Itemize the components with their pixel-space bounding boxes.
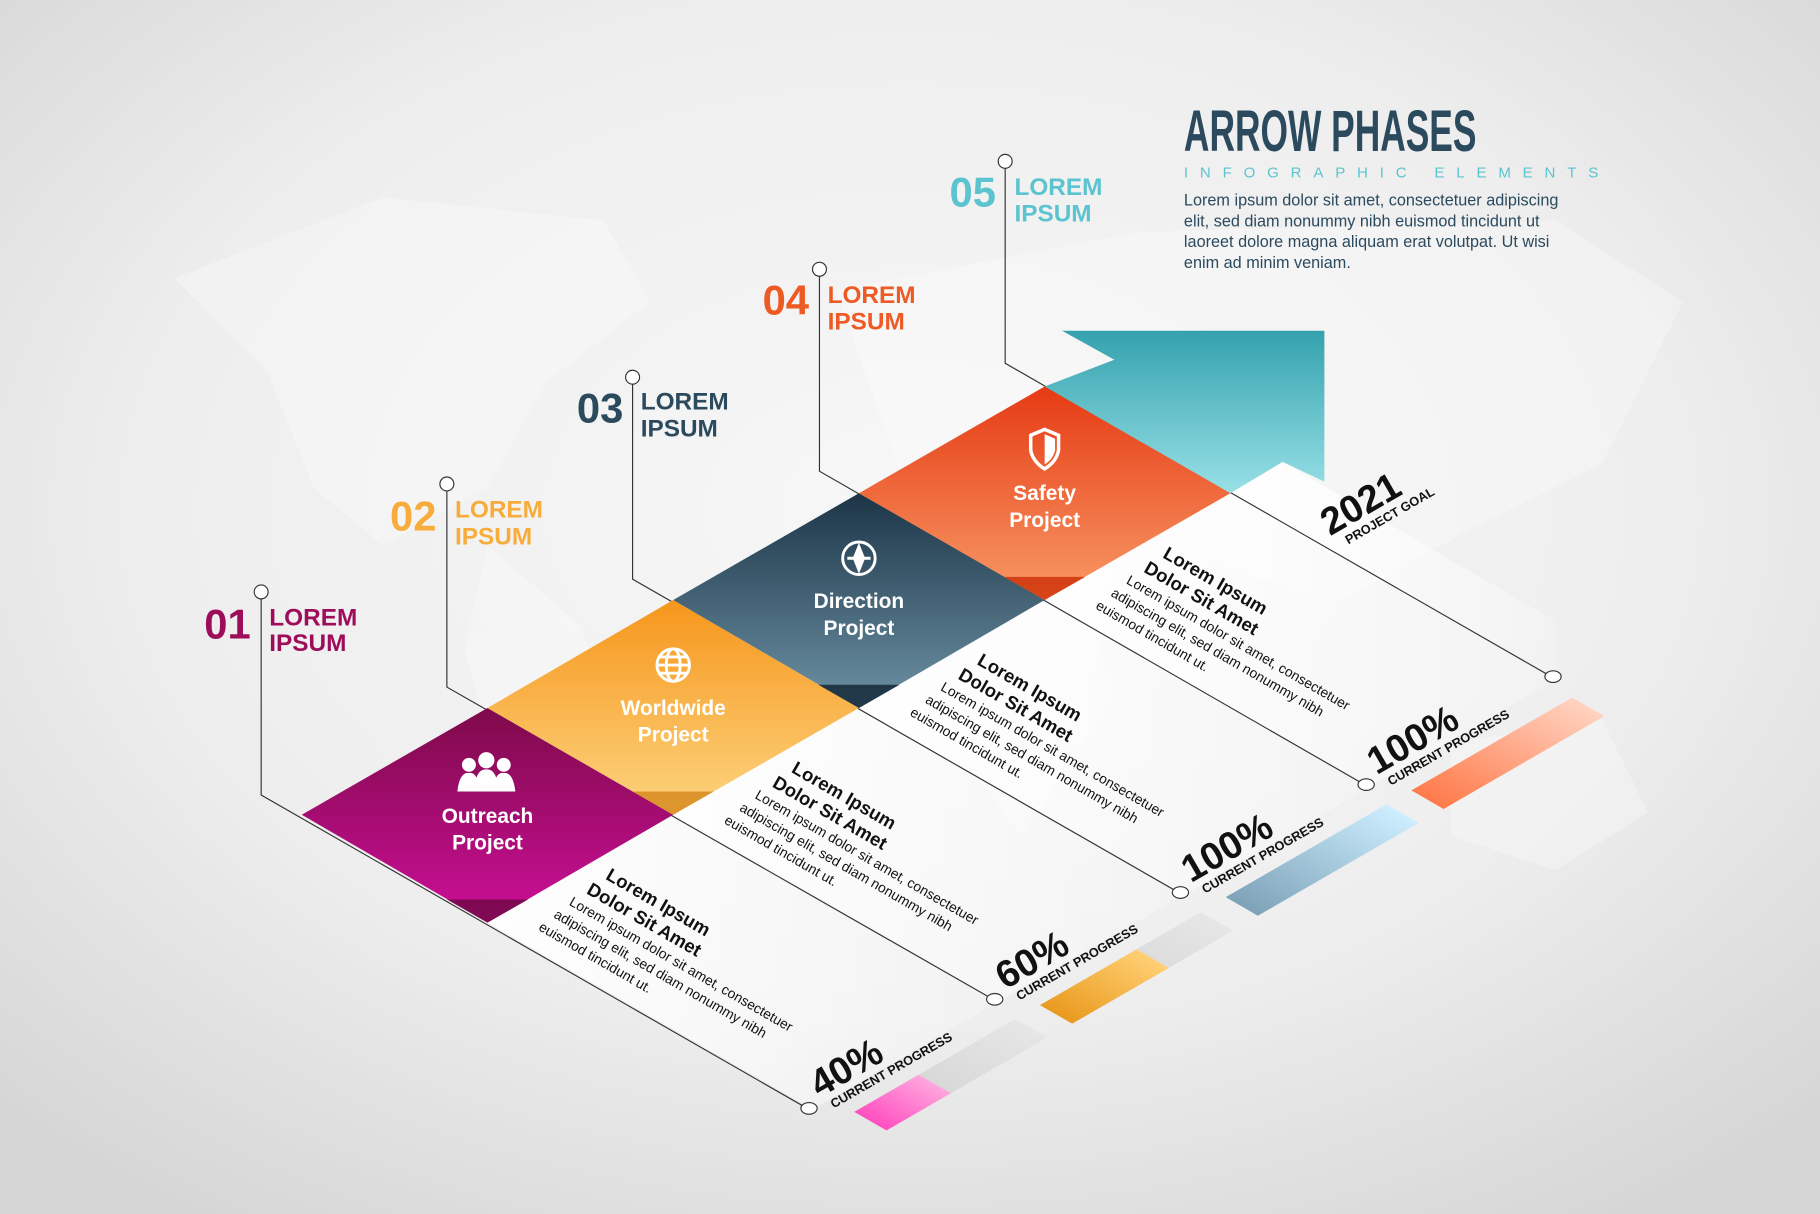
title block: ARROW PHASES	[1184, 99, 1476, 164]
title block: enim ad minim veniam.	[1184, 254, 1351, 272]
step labels	[204, 169, 1102, 657]
step 3: direction: Direction	[814, 590, 904, 613]
step labels: LOREM	[1014, 174, 1102, 201]
step 1: outreach: Outreach	[442, 805, 533, 828]
title block: laoreet dolore magna aliquam erat volutpat. Ut wisi	[1184, 233, 1549, 251]
progress labels: 40%	[802, 1030, 890, 1106]
band texts	[536, 526, 1376, 1067]
step labels: IPSUM	[455, 523, 532, 550]
band texts: Lorem ipsum dolor sit amet, consectetuer	[938, 679, 1167, 820]
step 4: safety	[859, 386, 1230, 600]
step 4: safety: Project	[1009, 509, 1080, 532]
progress labels: 100%	[1360, 697, 1466, 783]
step labels: LOREM	[455, 497, 543, 524]
icon: globe	[657, 649, 689, 681]
step labels: IPSUM	[269, 630, 346, 657]
step 1: outreach	[302, 708, 673, 923]
band texts: adipiscing elit, sed diam nonummy nibh	[1109, 584, 1327, 720]
band texts: Lorem ipsum dolor sit amet, consectetuer	[567, 893, 796, 1035]
band texts: Lorem ipsum dolor sit amet, consectetuer	[753, 786, 982, 928]
progress labels: 60%	[988, 922, 1076, 998]
step labels: 05	[949, 169, 996, 216]
band texts: Dolor Sit Amet	[584, 878, 705, 961]
step labels: LOREM	[828, 282, 916, 309]
band texts: euismod tincidunt ut.	[908, 704, 1026, 781]
band texts: Dolor Sit Amet	[1141, 557, 1262, 639]
band texts: adipiscing elit, sed diam nonummy nibh	[923, 691, 1141, 826]
icon: shield	[1031, 429, 1059, 469]
title block: INFOGRAPHIC ELEMENTS	[1184, 165, 1598, 182]
step labels: 04	[763, 277, 809, 324]
band texts: Lorem Ipsum	[603, 864, 714, 940]
step 1: outreach: Project	[452, 832, 523, 855]
step labels: IPSUM	[828, 309, 905, 336]
step labels: LOREM	[641, 389, 729, 416]
band texts: Dolor Sit Amet	[955, 664, 1077, 746]
title block: Lorem ipsum dolor sit amet, consectetuer adipiscing	[1184, 191, 1558, 209]
band texts: adipiscing elit, sed diam nonummy nibh	[552, 906, 770, 1041]
step 4: safety: Safety	[1013, 482, 1076, 505]
step 3: direction: Project	[824, 617, 894, 640]
step labels: 03	[577, 384, 623, 431]
progress bars	[854, 1019, 1047, 1130]
band texts: euismod tincidunt ut.	[536, 918, 655, 996]
progress labels: 100%	[1174, 805, 1280, 891]
step 2: worldwide	[488, 600, 859, 815]
title block: elit, sed diam nonummy nibh euismod tincidunt ut	[1184, 212, 1540, 230]
progress labels: CURRENT PROGRESS	[1385, 706, 1512, 788]
band texts: euismod tincidunt ut.	[722, 812, 840, 889]
progress labels	[802, 451, 1512, 1115]
step labels: 01	[204, 600, 251, 647]
step labels: IPSUM	[641, 415, 718, 442]
icon: people	[457, 752, 515, 792]
step 2: worldwide: Worldwide	[621, 697, 726, 720]
band texts: Dolor Sit Amet	[769, 772, 891, 854]
progress labels: PROJECT GOAL	[1342, 484, 1437, 547]
title block	[1184, 99, 1598, 272]
band texts: Lorem Ipsum	[1160, 542, 1271, 619]
progress labels: CURRENT PROGRESS	[828, 1029, 955, 1111]
step labels: 02	[390, 492, 436, 539]
band texts: adipiscing elit, sed diam nonummy nibh	[737, 799, 955, 934]
progress labels: CURRENT PROGRESS	[1013, 921, 1140, 1003]
bands: white strips under steps	[488, 462, 1555, 1110]
icon: compass	[843, 542, 875, 575]
step labels: IPSUM	[1014, 201, 1092, 228]
band texts: Lorem Ipsum	[788, 757, 900, 834]
band texts: euismod tincidunt ut.	[1093, 597, 1212, 675]
progress labels: 2021	[1313, 464, 1408, 544]
band texts: Lorem ipsum dolor sit amet, consectetuer	[1124, 572, 1353, 713]
step labels: LOREM	[269, 605, 357, 632]
progress labels: CURRENT PROGRESS	[1199, 814, 1326, 896]
step 2: worldwide: Project	[638, 724, 709, 747]
connector lines	[254, 154, 1561, 1114]
arrow head	[1045, 331, 1324, 493]
step 3: direction	[673, 493, 1045, 708]
band texts: Lorem Ipsum	[974, 649, 1086, 726]
